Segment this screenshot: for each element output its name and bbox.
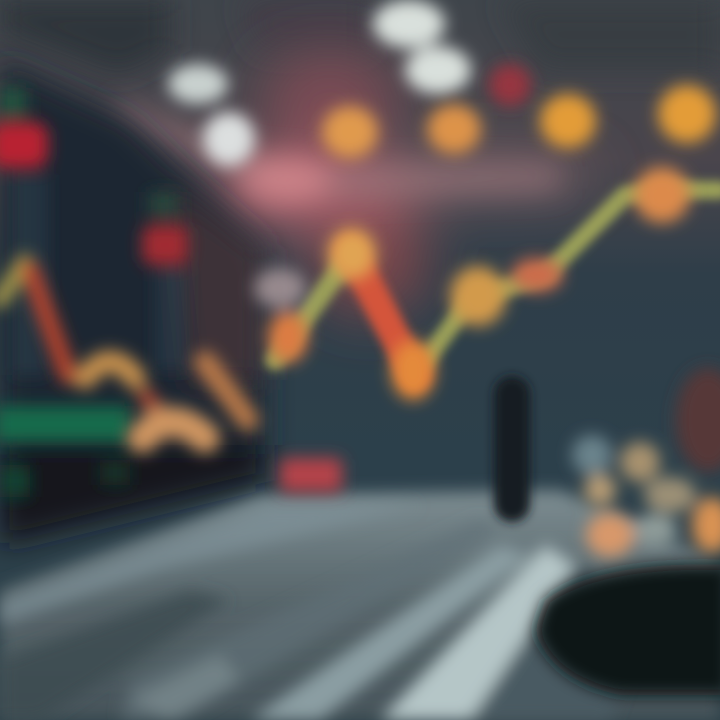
ceiling shadows: [0, 0, 720, 75]
icon: orange ceiling lamps: [322, 64, 716, 158]
floor light stripes: [0, 505, 640, 720]
dark pillar: [494, 376, 530, 522]
panel: left dark screen: [0, 60, 265, 545]
light beams: [110, 100, 560, 204]
dark foreground object: [535, 564, 720, 695]
line chart: main trace green-yellow: [275, 190, 720, 375]
icon: white ceiling lamps: [168, 0, 471, 166]
line chart: main trace highlights: [254, 167, 690, 400]
panel: red glow centre: [210, 50, 600, 315]
floor: [0, 490, 720, 720]
line chart: left trace: [0, 262, 248, 438]
right foreground glow objects: [572, 368, 720, 557]
red block on floor: [280, 458, 342, 492]
left screen candles: [0, 88, 188, 497]
